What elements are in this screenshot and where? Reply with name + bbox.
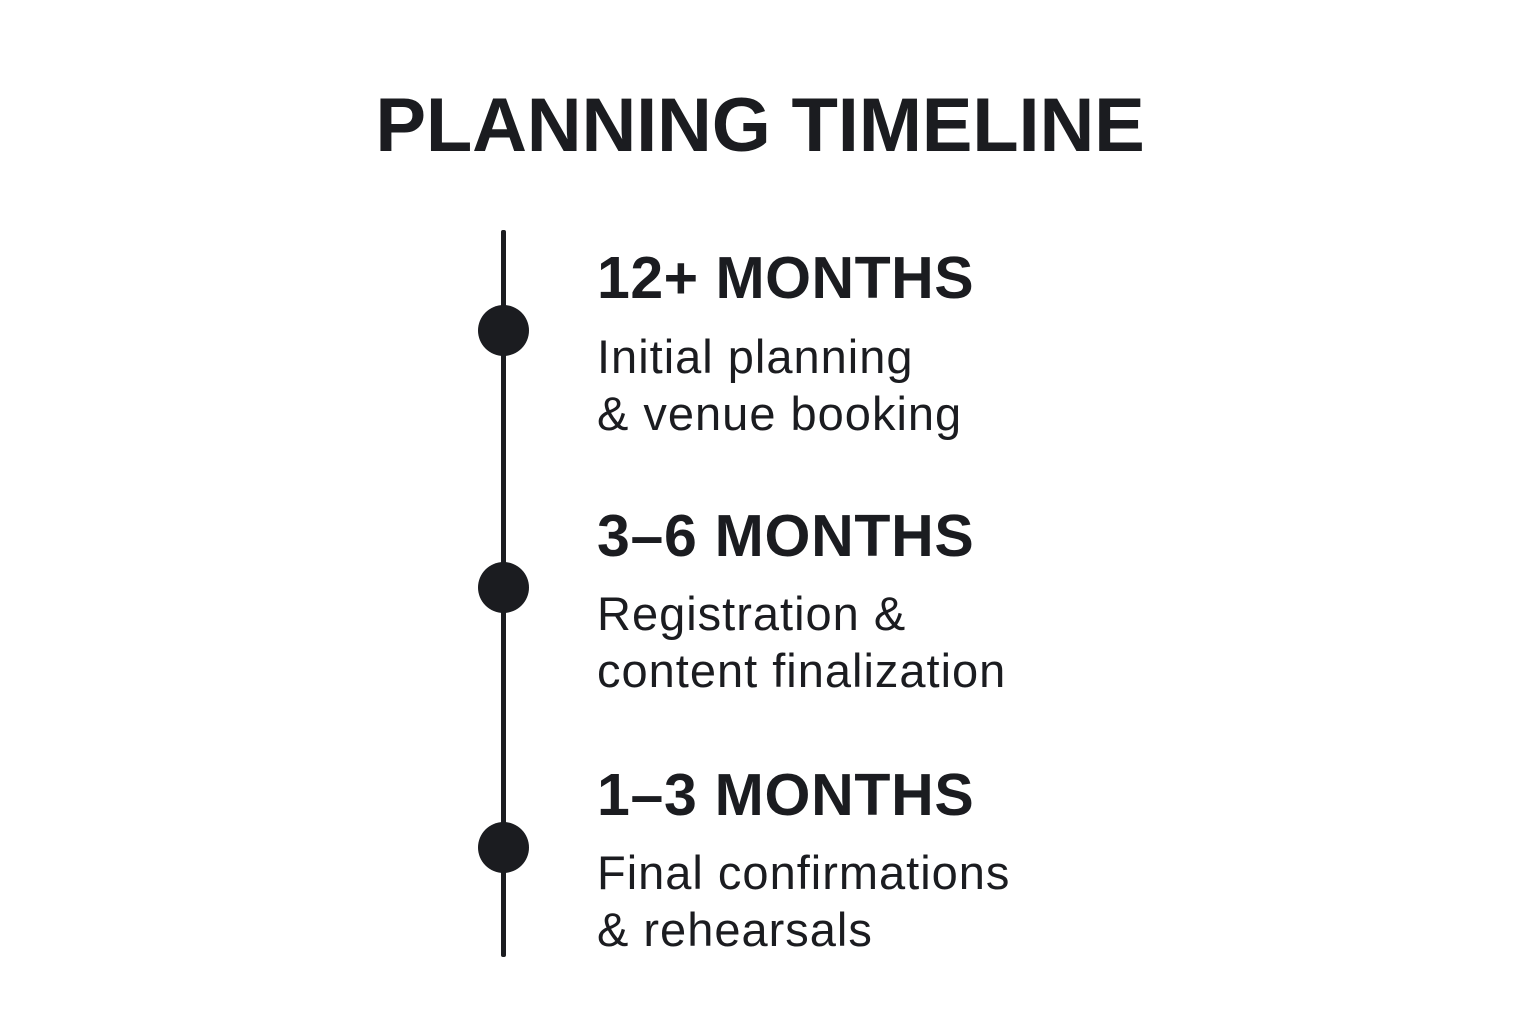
title: PLANNING TIMELINE xyxy=(375,83,1145,168)
text: registration: Registration & xyxy=(597,587,906,640)
text: final confirmations: & rehearsals xyxy=(597,903,873,956)
marker: 1-3 months xyxy=(478,822,529,873)
text: final confirmations: Final confirmations xyxy=(597,846,1010,899)
text: initial planning: & venue booking xyxy=(597,387,962,440)
heading: 1-3 months: 1–3 MONTHS xyxy=(597,762,974,828)
text: registration: content finalization xyxy=(597,644,1006,697)
marker: 3-6 months xyxy=(478,562,529,613)
marker: 12+ months xyxy=(478,305,529,356)
text: initial planning: Initial planning xyxy=(597,330,914,383)
heading: 12+ months: 12+ MONTHS xyxy=(597,245,974,311)
text: registration xyxy=(597,587,1006,697)
text: initial planning xyxy=(597,330,962,440)
heading: 3-6 months: 3–6 MONTHS xyxy=(597,503,974,569)
timeline vertical line xyxy=(501,230,506,957)
text: final confirmations xyxy=(597,846,1010,956)
